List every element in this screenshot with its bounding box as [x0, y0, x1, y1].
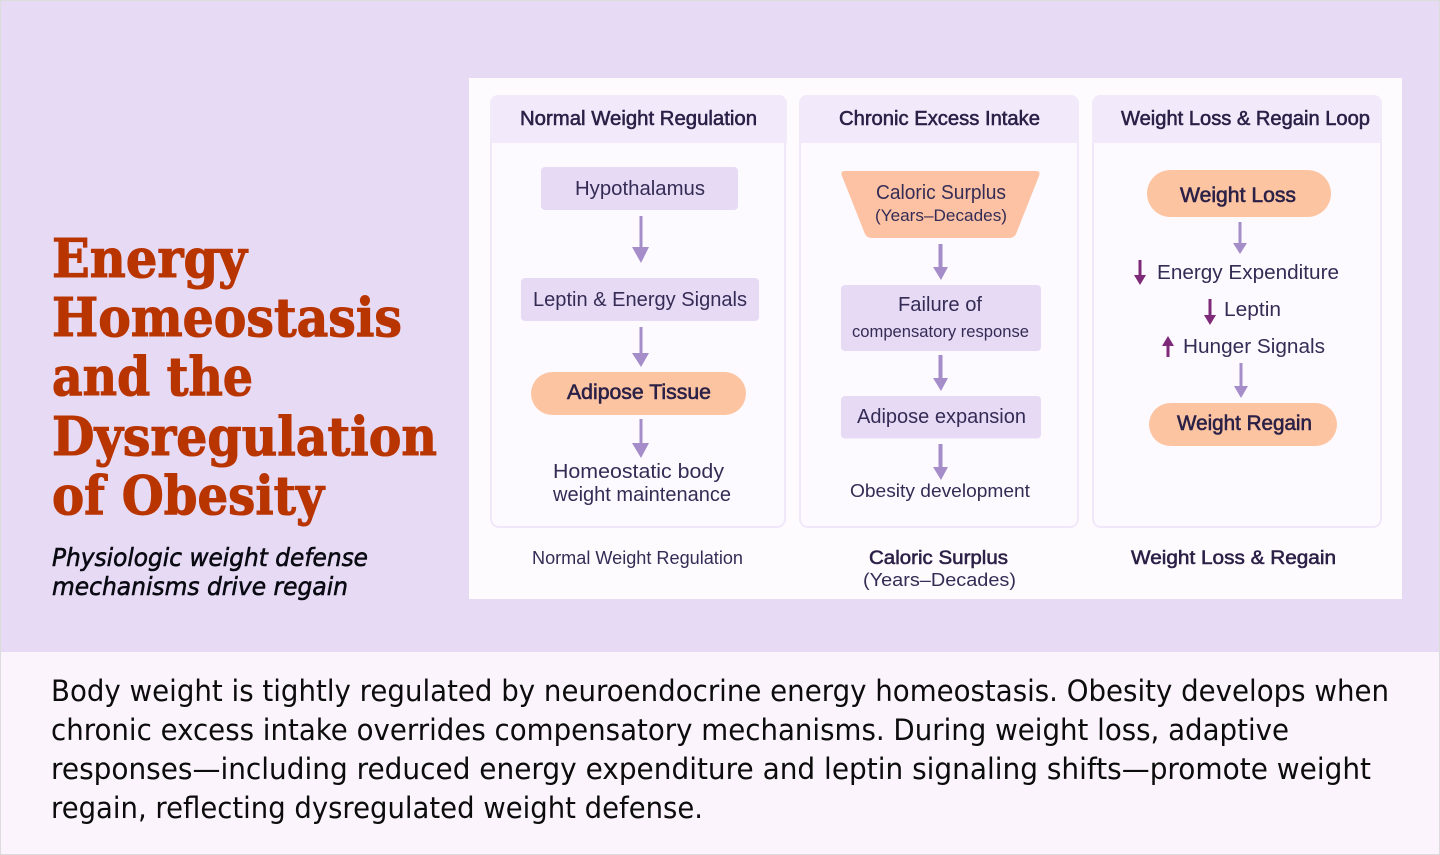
- panel: weight loss and regain loop: [1092, 95, 1382, 527]
- pill: adipose tissue: Adipose Tissue: [567, 381, 711, 404]
- box: failure of compensatory response: Failure of: [898, 294, 982, 316]
- pill: adipose tissue: [531, 372, 746, 415]
- trapezoid: caloric surplus: Caloric Surplus: [876, 182, 1006, 204]
- caption: weight loss and regain: Weight Loss & Regain: [1131, 548, 1336, 569]
- title: [52, 228, 437, 527]
- description text: Body weight is tightly regulated by neuroendocrine energy homeostasis. Obesity develops when: [51, 674, 1389, 708]
- title: Energy: [52, 228, 249, 290]
- arrow: [1233, 222, 1247, 254]
- arrow: [632, 419, 649, 458]
- box: leptin and energy signals: [521, 278, 759, 321]
- heading: Weight Loss & Regain Loop: [1121, 108, 1370, 130]
- description text: regain, reflecting dysregulated weight defense.: [51, 791, 703, 825]
- box: hypothalamus: [541, 167, 738, 210]
- heading: Chronic Excess Intake: [839, 108, 1040, 130]
- pill: weight loss: [1147, 170, 1331, 217]
- title: Dysregulation: [52, 406, 437, 468]
- pill: weight regain: [1149, 403, 1337, 446]
- title: and the: [52, 346, 253, 408]
- description text: chronic excess intake overrides compensatory mechanisms. During weight loss, adaptive: [51, 713, 1289, 747]
- item: energy expenditure down: Energy Expenditure: [1157, 262, 1339, 284]
- item: hunger signals up: Hunger Signals: [1183, 336, 1325, 358]
- item: leptin down: [1204, 299, 1281, 325]
- arrow: [933, 244, 948, 280]
- text: obesity development: Obesity development: [850, 481, 1030, 501]
- caption: normal weight regulation: Normal Weight Regulation: [532, 548, 743, 568]
- arrow: [632, 327, 649, 367]
- pill: weight regain: Weight Regain: [1177, 412, 1312, 435]
- arrow: [933, 355, 948, 391]
- title: of Obesity: [52, 465, 326, 527]
- box: failure of compensatory response: compensatory response: [852, 322, 1029, 341]
- trapezoid: caloric surplus: (Years–Decades): [875, 206, 1007, 225]
- description text: responses—including reduced energy expenditure and leptin signaling shifts—promote weight: [51, 752, 1371, 786]
- trapezoid: caloric surplus: [841, 171, 1040, 238]
- description panel: [0, 652, 1440, 855]
- subtitle: mechanisms drive regain: [52, 572, 348, 601]
- arrow: [1234, 363, 1248, 398]
- subtitle: Physiologic weight defense: [52, 543, 368, 572]
- text: homeostatic body weight maintenance: Homeostatic body: [553, 461, 724, 483]
- caption: caloric surplus: Caloric Surplus: [869, 548, 1008, 569]
- arrow: [933, 444, 948, 480]
- title: Homeostasis: [52, 287, 402, 349]
- panel: normal weight regulation: [490, 95, 787, 527]
- box: adipose expansion: Adipose expansion: [857, 406, 1026, 428]
- box: leptin and energy signals: Leptin & Energy Signals: [533, 289, 747, 311]
- text: homeostatic body weight maintenance: weight maintenance: [552, 484, 731, 506]
- panel: chronic excess intake: [799, 95, 1079, 527]
- caption: caloric surplus: (Years–Decades): [863, 570, 1016, 590]
- diagram panel: [469, 78, 1402, 599]
- item: leptin down: Leptin: [1224, 299, 1281, 321]
- arrow: [632, 216, 649, 263]
- pill: weight loss: Weight Loss: [1180, 184, 1296, 207]
- box: failure of compensatory response: [841, 285, 1041, 351]
- text: homeostatic body weight maintenance: [552, 461, 731, 506]
- caption: caloric surplus: [863, 548, 1016, 590]
- box: hypothalamus: Hypothalamus: [575, 178, 705, 200]
- box: adipose expansion: [841, 396, 1041, 438]
- description text: [51, 674, 1389, 825]
- heading: Normal Weight Regulation: [520, 108, 757, 130]
- subtitle: [52, 543, 368, 601]
